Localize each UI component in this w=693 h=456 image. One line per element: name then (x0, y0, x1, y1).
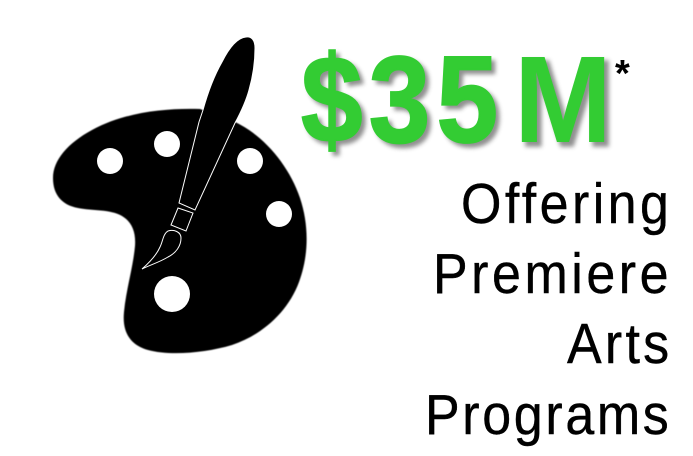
headline shadow: M (518, 36, 616, 173)
footnote asterisk: * (615, 53, 630, 95)
palette body (53, 109, 307, 353)
line: Programs: Programs (425, 383, 669, 446)
headline figure: $35 M (301, 31, 616, 173)
line: Offering: Offering (461, 172, 669, 235)
icon: artist palette with brush (53, 37, 307, 353)
brush ferrule (171, 208, 193, 231)
palette paint wells (97, 131, 292, 312)
headline shadow (305, 35, 616, 173)
brush handle (179, 37, 255, 210)
line: Premiere: Premiere (433, 242, 669, 305)
headline shadow: $35 (305, 35, 502, 172)
line: Arts: Arts (567, 312, 669, 375)
headline text (301, 31, 612, 169)
headline text: $35 (301, 31, 498, 168)
headline text: M (514, 32, 612, 169)
description text (425, 172, 669, 446)
brush bristles (142, 230, 181, 269)
